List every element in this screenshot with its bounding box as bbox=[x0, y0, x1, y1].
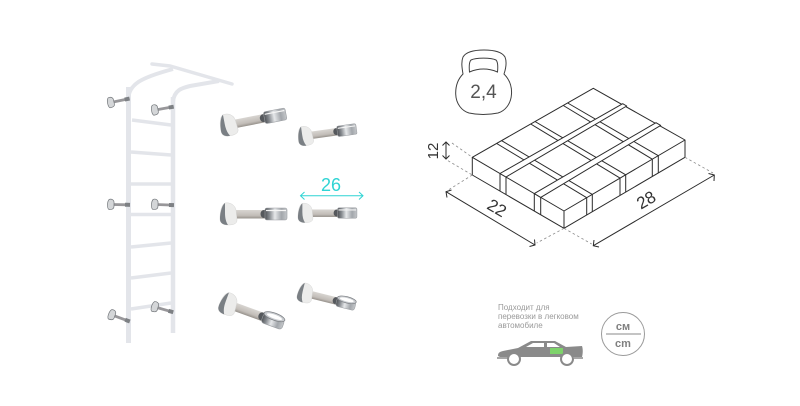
dimension: bracket length 26: 26 bbox=[321, 175, 341, 195]
package box bbox=[472, 88, 685, 228]
dimension: bracket length 26 bbox=[300, 175, 363, 200]
bracket: top right bbox=[297, 119, 358, 147]
dimension: height 12: 12 bbox=[425, 143, 442, 159]
icon: car bbox=[497, 341, 583, 365]
car transport note line 3: автомобиле bbox=[498, 321, 543, 330]
icon: units cm badge bbox=[602, 312, 644, 356]
bracket: top left bbox=[218, 103, 288, 137]
ladder mounted brackets bbox=[106, 93, 175, 326]
icon: kettlebell weight: 2,4 bbox=[470, 82, 497, 103]
car transport note: Подходит для bbox=[498, 303, 550, 312]
dimension: length 28: 28 bbox=[633, 187, 659, 213]
bracket: middle right bbox=[298, 203, 357, 223]
bracket: bottom right bbox=[296, 282, 358, 315]
icon: units cm badge: см bbox=[616, 321, 630, 333]
dashed extension lines bbox=[448, 143, 713, 244]
bracket: bottom left bbox=[217, 291, 287, 335]
car transport note line 2: перевозки в легковом bbox=[498, 312, 579, 321]
icon: kettlebell weight bbox=[456, 50, 512, 114]
wall ladder bbox=[106, 64, 232, 343]
dimension: length 28 bbox=[593, 174, 714, 247]
dimension: width 22: 22 bbox=[484, 195, 510, 221]
icon: units cm badge: cm bbox=[615, 338, 631, 350]
dimension: height 12 bbox=[425, 142, 450, 159]
bracket: middle left bbox=[220, 203, 287, 225]
dimension: width 22 bbox=[446, 190, 535, 246]
